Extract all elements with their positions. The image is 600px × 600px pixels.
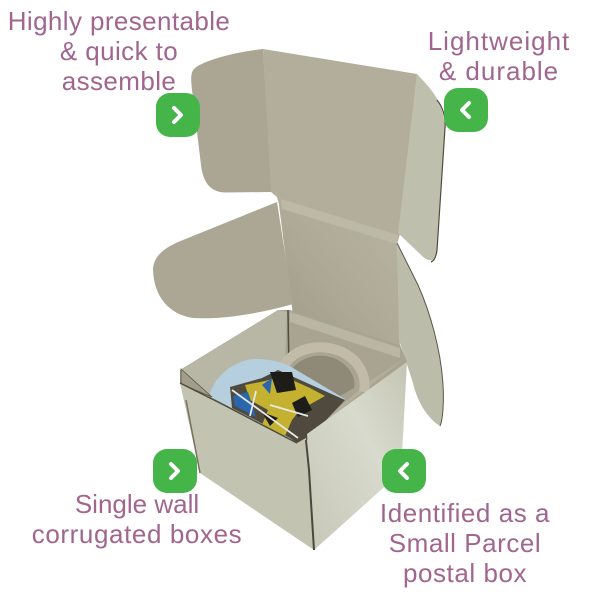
box edge seam: [306, 440, 314, 550]
label: highly presentable: & quick to: [60, 36, 178, 66]
right lower flap: [397, 243, 443, 426]
right lower flap dark edge: [397, 243, 443, 426]
label: highly presentable: [8, 6, 230, 96]
back lid panel: [263, 49, 417, 244]
box front-left face: [180, 383, 314, 550]
crease of lid: [281, 199, 398, 244]
label: single wall: corrugated boxes: [32, 519, 242, 549]
box interior opening: [180, 310, 407, 446]
label: identified: [380, 498, 550, 588]
lower-left lid flap: [153, 202, 293, 318]
label: identified: postal box: [403, 558, 527, 588]
blue graphic: [233, 377, 290, 417]
interior inner dark corner: [288, 310, 289, 372]
yellow graphic: [245, 376, 325, 436]
mug body: [209, 359, 345, 445]
icon: arrow bottom left: [153, 449, 197, 493]
right top flap dark edge: [431, 100, 445, 262]
label: highly presentable: assemble: [62, 66, 176, 96]
mug: [209, 347, 365, 446]
box top left rim shadow: [180, 383, 297, 443]
inner back wall: [279, 205, 400, 350]
box interior back wall band: [290, 312, 400, 358]
label: lightweight: Lightweight: [428, 26, 570, 56]
mug inner shadow: [290, 356, 354, 396]
label: highly presentable: Highly presentable: [8, 6, 230, 36]
mug print: [230, 370, 345, 446]
icon: arrow top left: [156, 93, 200, 137]
icon: arrow bottom right: [382, 449, 426, 493]
black graphic: [262, 372, 312, 426]
box left dark edge: [186, 400, 200, 473]
box interior left wall: [181, 310, 287, 396]
label: lightweight: & durable: [439, 56, 559, 86]
box left tab: [181, 369, 212, 397]
top-left lid flap: [191, 49, 272, 192]
icon: arrow top right: [444, 88, 488, 132]
mug handle: [283, 347, 365, 392]
label: lightweight: [428, 26, 570, 86]
label: single wall: Single wall: [75, 489, 199, 519]
label: identified: Identified as a: [380, 498, 550, 528]
label: identified: Small Parcel: [389, 528, 541, 558]
box right face: [307, 362, 407, 550]
label: single wall: [32, 489, 242, 549]
right top flap: [398, 74, 445, 260]
glare: [232, 390, 308, 438]
interior right rim band: [307, 358, 405, 436]
